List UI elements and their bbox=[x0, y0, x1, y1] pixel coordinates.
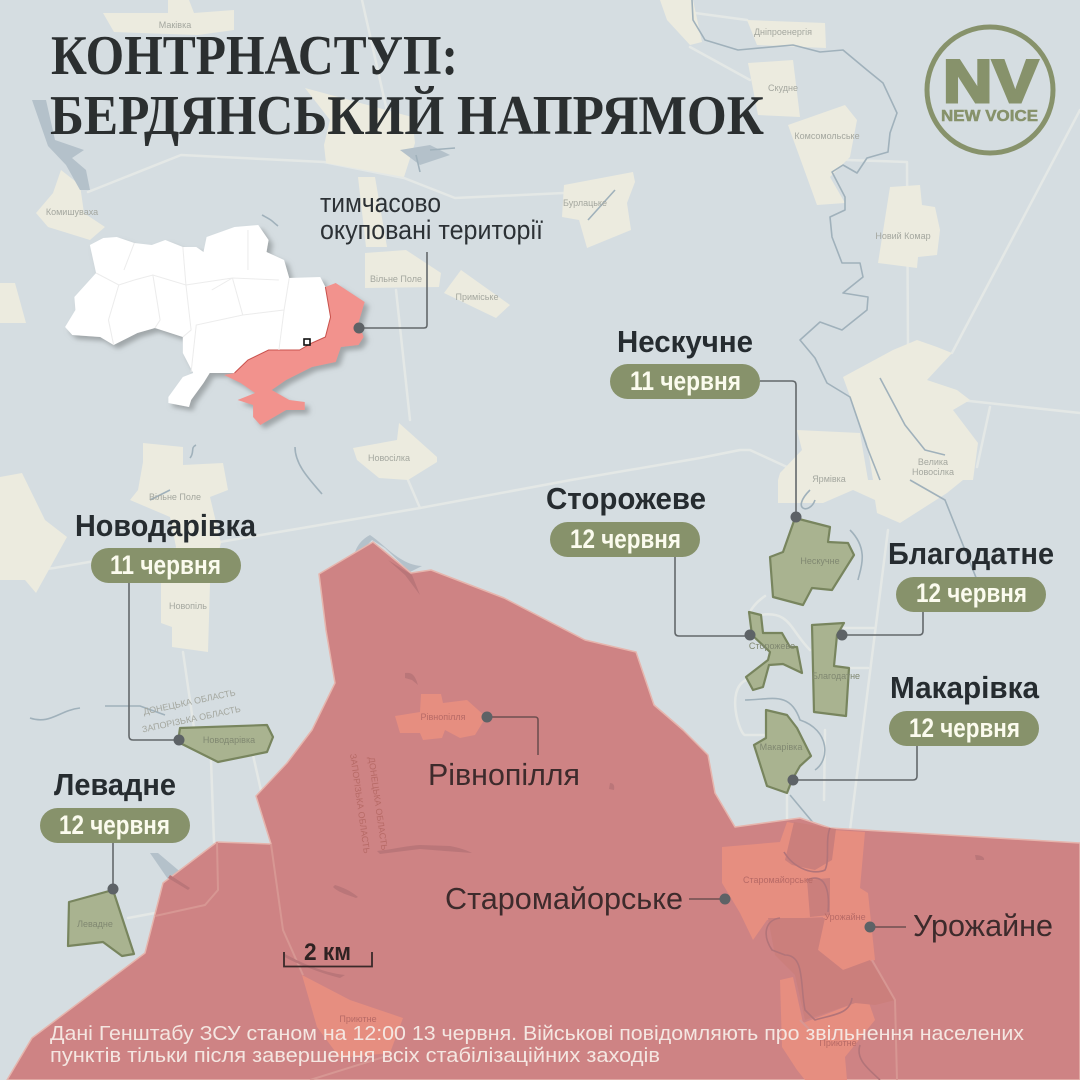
settlements inside occupied area bbox=[168, 560, 984, 1080]
title: БЕРДЯНСЬКИЙ НАПРЯМОК bbox=[50, 85, 764, 147]
callout: temporarily occupied territories bbox=[320, 188, 543, 334]
callout: temporarily occupied territories: тимчасово bbox=[320, 188, 441, 218]
small map place names: Новосілка bbox=[912, 467, 954, 477]
scale bar: 2 km bbox=[284, 939, 372, 966]
small map place names: Благодатне bbox=[812, 671, 860, 681]
label: Урожайне: Урожайне bbox=[913, 908, 1053, 943]
small map place names: Комишуваха bbox=[46, 207, 98, 217]
small map place names: ЗАПОРІЗЬКА ОБЛАСТЬ bbox=[141, 704, 242, 734]
small map place names: Бурлацьке bbox=[563, 198, 607, 208]
label: Рівнопілля: Рівнопілля bbox=[428, 757, 580, 792]
title bbox=[50, 25, 764, 147]
title: КОНТРНАСТУП: bbox=[51, 25, 458, 87]
small map place names: Маківка bbox=[159, 20, 191, 30]
label: Нескучне: 11 червня bbox=[630, 366, 741, 396]
liberated settlement: Сторожеве bbox=[746, 612, 802, 690]
footnote: source and methodology bbox=[50, 1023, 1024, 1067]
footnote: source and methodology: Дані Генштабу ЗСУ станом на 12:00 13 червня. Військові повідомляють про звільнення населених bbox=[50, 1023, 1024, 1045]
label: Новодарівка: Новодарівка bbox=[75, 508, 257, 543]
label: Нескучне bbox=[610, 324, 802, 522]
small map place names: Рівнопілля bbox=[420, 712, 466, 722]
small map place names: Ярмівка bbox=[812, 474, 846, 484]
occupied territories on inset bbox=[224, 283, 365, 425]
label: Рівнопілля bbox=[428, 712, 580, 792]
small map place names: Велика bbox=[918, 457, 948, 467]
label: Благодатне: Благодатне bbox=[888, 536, 1054, 571]
small map place names: Комсомольське bbox=[794, 131, 860, 141]
label: Сторожеве bbox=[546, 481, 756, 640]
small map place names: Приміське bbox=[456, 292, 498, 302]
small map place names: Новосілка bbox=[368, 453, 410, 463]
small map place names: Левадне bbox=[77, 919, 113, 929]
label: Новодарівка: 11 червня bbox=[110, 550, 221, 580]
small map place names: Приютне bbox=[339, 1014, 377, 1024]
label: Левадне bbox=[40, 767, 190, 894]
label: Новодарівка bbox=[75, 508, 257, 746]
label: Макарівка: Макарівка bbox=[890, 670, 1040, 705]
liberated settlement: Левадне bbox=[68, 890, 134, 956]
label: Нескучне: Нескучне bbox=[617, 324, 753, 359]
label: Благодатне bbox=[836, 536, 1054, 640]
small map place names: Вільне Поле bbox=[370, 274, 422, 284]
liberated settlement: Макарівка bbox=[754, 710, 811, 793]
liberated settlement: Благодатне bbox=[812, 623, 849, 716]
label: Сторожеве: Сторожеве bbox=[546, 481, 706, 516]
small map place names: Скудне bbox=[768, 83, 798, 93]
map of Ukraine inset bbox=[65, 225, 365, 425]
small map place names: Нескучне bbox=[800, 556, 840, 566]
Ukraine free territory bbox=[65, 225, 331, 407]
occupied territory area bbox=[7, 542, 1080, 1080]
small map place names: Приютне bbox=[819, 1038, 857, 1048]
label: Старомайорське: Старомайорське bbox=[445, 881, 683, 916]
small map place names: Урожайне bbox=[824, 912, 866, 922]
callout: temporarily occupied territories: окуповані території bbox=[320, 215, 543, 245]
small map place names: Макарівка bbox=[760, 742, 802, 752]
logo: NV New Voice: NV bbox=[943, 48, 1038, 115]
small map place names: Дніпроенергія bbox=[754, 27, 812, 37]
liberated settlement: Нескучне bbox=[770, 518, 854, 605]
small map place names: ДОНЕЦЬКА ОБЛАСТЬ bbox=[366, 756, 389, 851]
small map place names: Новопіль bbox=[169, 601, 207, 611]
scale bar: 2 km: 2 км bbox=[304, 939, 351, 966]
small map place names: Сторожеве bbox=[749, 641, 795, 651]
small map place names: Старомайорське bbox=[743, 875, 813, 885]
label: Левадне: Левадне bbox=[54, 767, 176, 802]
label: Сторожеве: 12 червня bbox=[570, 524, 681, 554]
liberated settlement: Новодарівка bbox=[178, 725, 273, 762]
label: Левадне: 12 червня bbox=[59, 810, 170, 840]
label: Макарівка bbox=[788, 670, 1040, 786]
logo: NV New Voice bbox=[927, 27, 1053, 153]
label: Благодатне: 12 червня bbox=[916, 578, 1027, 608]
logo: NV New Voice: NEW VOICE bbox=[941, 108, 1038, 125]
small map place names: Новодарівка bbox=[203, 735, 255, 745]
small map place names: ДОНЕЦЬКА ОБЛАСТЬ bbox=[142, 687, 237, 717]
icon: Berdiansk direction marker on inset bbox=[304, 339, 310, 345]
small map place names: ЗАПОРІЗЬКА ОБЛАСТЬ bbox=[348, 753, 372, 854]
label: Макарівка: 12 червня bbox=[909, 713, 1020, 743]
footnote: source and methodology: пунктів тільки після завершення всіх стабілізаційних заходів bbox=[50, 1045, 660, 1067]
small map place names: Вільне Поле bbox=[149, 492, 201, 502]
small map place names: Новий Комар bbox=[875, 231, 931, 241]
